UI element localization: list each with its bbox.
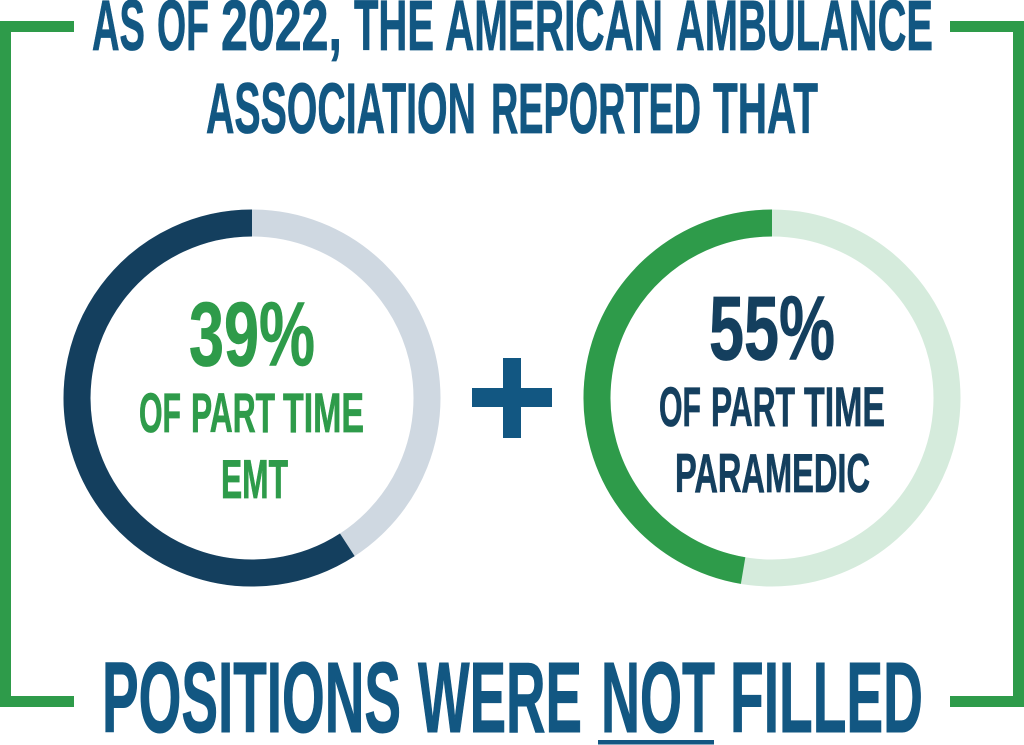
label: 39% of part time EMT: EMT (221, 448, 288, 510)
label: 39% of part time EMT: OF (139, 381, 181, 444)
label: 55% of part time paramedic: OF (659, 375, 701, 438)
label: 55% of part time paramedic: 55% (709, 278, 835, 380)
title (92, 0, 933, 149)
conclusion heading (102, 642, 923, 745)
label: 55% of part time paramedic: TIME (804, 375, 885, 438)
title: REPORTED (491, 70, 701, 149)
label: 55% of part time paramedic: PART (711, 375, 795, 438)
label: 39% of part time EMT: 39% (189, 284, 315, 386)
icon: plus sign (472, 358, 552, 438)
label: 39% of part time EMT: PART (191, 381, 275, 444)
label: 39% of part time EMT: TIME (283, 381, 364, 444)
label: 55% of part time paramedic: PARAMEDIC (675, 442, 870, 504)
label: 39% of part time EMT (139, 284, 364, 510)
donut chart: 55% paramedic (597, 223, 947, 573)
left bracket (6, 26, 74, 702)
right bracket (950, 26, 1018, 702)
title: ASSOCIATION (206, 70, 476, 149)
title: THAT (713, 70, 818, 149)
label: 55% of part time paramedic (659, 278, 885, 504)
donut chart: 39% EMT (77, 223, 427, 573)
